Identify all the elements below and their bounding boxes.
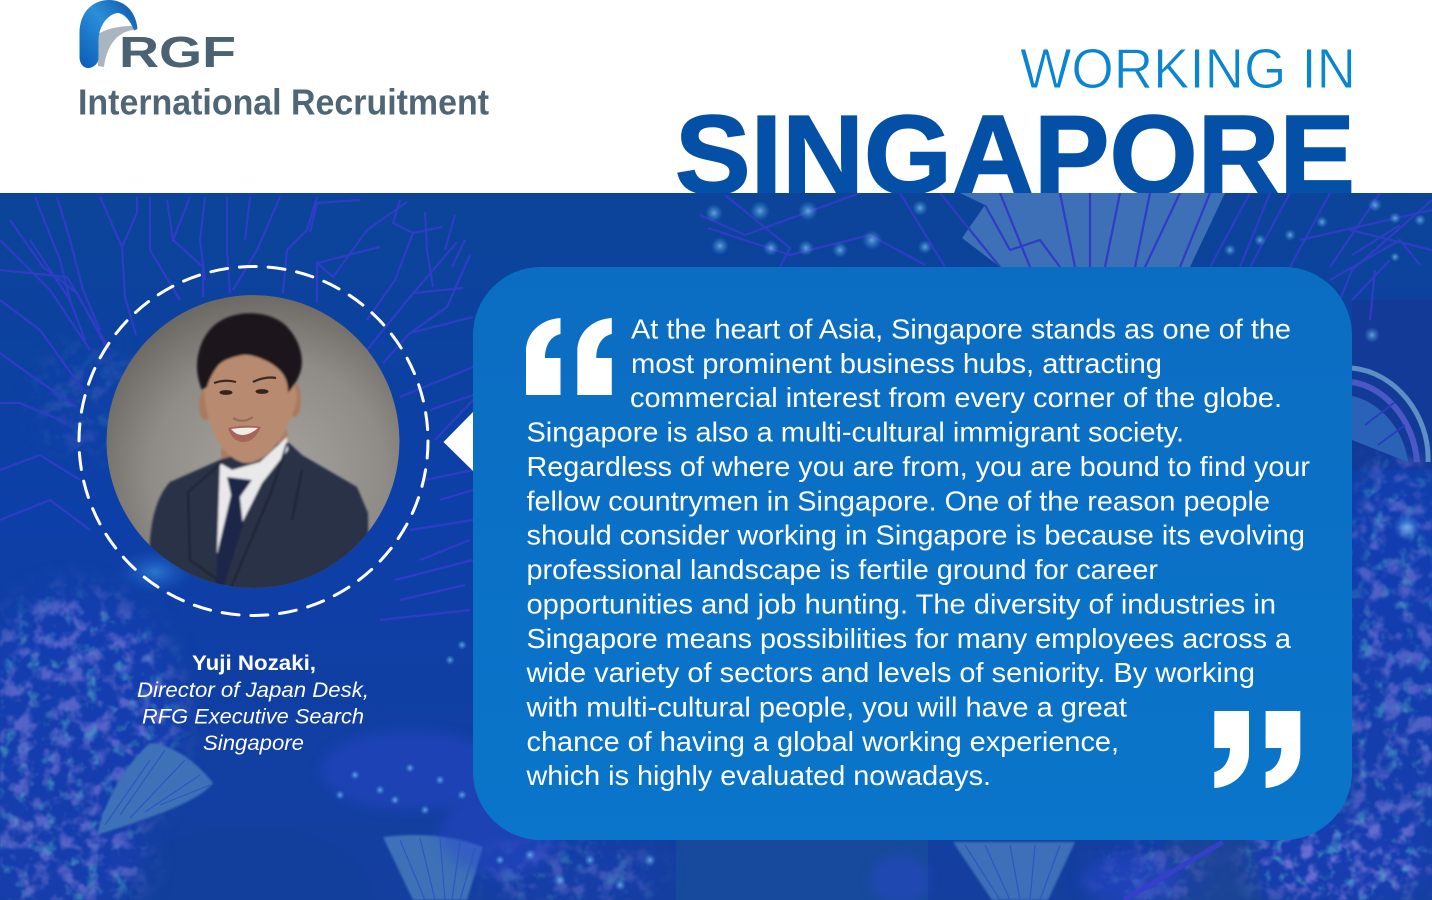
icon: opening quotation mark — [526, 318, 612, 395]
glow near portrait — [126, 556, 183, 588]
quote text: should consider working in Singapore is because its evolving — [526, 520, 1305, 551]
suit — [146, 441, 369, 600]
quote text: Singapore is also a multi-cultural immigrant society. — [526, 417, 1184, 448]
pointer arrow — [444, 412, 473, 471]
speaker company: RFG Executive Search — [142, 704, 364, 728]
quote text: with multi-cultural people, you will have a great — [525, 692, 1127, 722]
title — [675, 37, 1356, 218]
quote text: most prominent business hubs, attracting — [631, 348, 1162, 379]
right side dark sky — [1352, 300, 1432, 470]
portrait with dashed ring — [79, 266, 428, 616]
branch lines — [0, 193, 1432, 620]
quote text — [525, 314, 1310, 791]
icon: logo arch — [80, 0, 138, 68]
purple canopy behind lower fans — [320, 730, 1180, 900]
quote text: chance of having a global working experience, — [526, 726, 1119, 757]
portrait photo — [106, 295, 400, 600]
speaker location: Singapore — [203, 731, 304, 755]
ears — [199, 390, 211, 420]
pale supertree fan bottom centre — [953, 842, 1075, 900]
diagonal walkway — [1124, 842, 1223, 900]
quote text: wide variety of sectors and levels of seniority. By working — [525, 657, 1255, 688]
pale supertree fan bottom — [383, 835, 483, 900]
quote text: Regardless of where you are from, you are bound to find your — [526, 451, 1310, 482]
dashed ring — [79, 266, 428, 616]
mouth — [228, 426, 261, 442]
hair — [197, 313, 302, 393]
quote text: professional landscape is fertile ground for career — [526, 554, 1158, 585]
quote text: commercial interest from every corner of the globe. — [630, 382, 1282, 413]
lapel shading — [188, 443, 302, 590]
fan streaks — [105, 750, 1060, 900]
white header background — [0, 0, 1432, 193]
eyes — [220, 390, 232, 395]
light dots on branches — [335, 198, 1426, 891]
logo wordmark RGF: RGF — [119, 28, 236, 77]
calm water areas — [676, 838, 928, 900]
speaker name: Yuji Nozaki, — [192, 652, 316, 675]
nose shadow — [233, 417, 253, 421]
speaker caption — [137, 652, 369, 755]
pale supertree fan top — [960, 193, 1225, 267]
neck — [220, 428, 290, 461]
shirt — [217, 437, 288, 553]
quote text: fellow countrymen in Singapore. One of the reason people — [526, 485, 1270, 516]
quote text: which is highly evaluated nowadays. — [525, 760, 991, 791]
tie — [216, 477, 252, 585]
icon: closing quotation mark — [1214, 711, 1300, 788]
speaker role: Director of Japan Desk, — [137, 678, 369, 702]
observation ring — [1352, 368, 1428, 462]
quote text: At the heart of Asia, Singapore stands as one of the — [631, 314, 1291, 344]
quote text: Singapore means possibilities for many employees across a — [526, 623, 1291, 654]
face — [205, 345, 297, 463]
title line: working in: WORKING IN — [1020, 37, 1356, 101]
noise foliage — [0, 344, 1432, 900]
background band: night view of Supertree Grove — [0, 193, 1432, 900]
eyebrows — [214, 378, 276, 383]
title line: singapore: SINGAPORE — [675, 92, 1355, 218]
logo: RGF International Recruitment — [78, 0, 489, 122]
quote panel background — [473, 267, 1352, 840]
panel: quote — [473, 267, 1352, 840]
logo subtitle: International Recruitment — [78, 82, 489, 122]
quote text: opportunities and job hunting. The diversity of industries in — [526, 588, 1276, 619]
pale supertree fan left — [97, 743, 213, 835]
